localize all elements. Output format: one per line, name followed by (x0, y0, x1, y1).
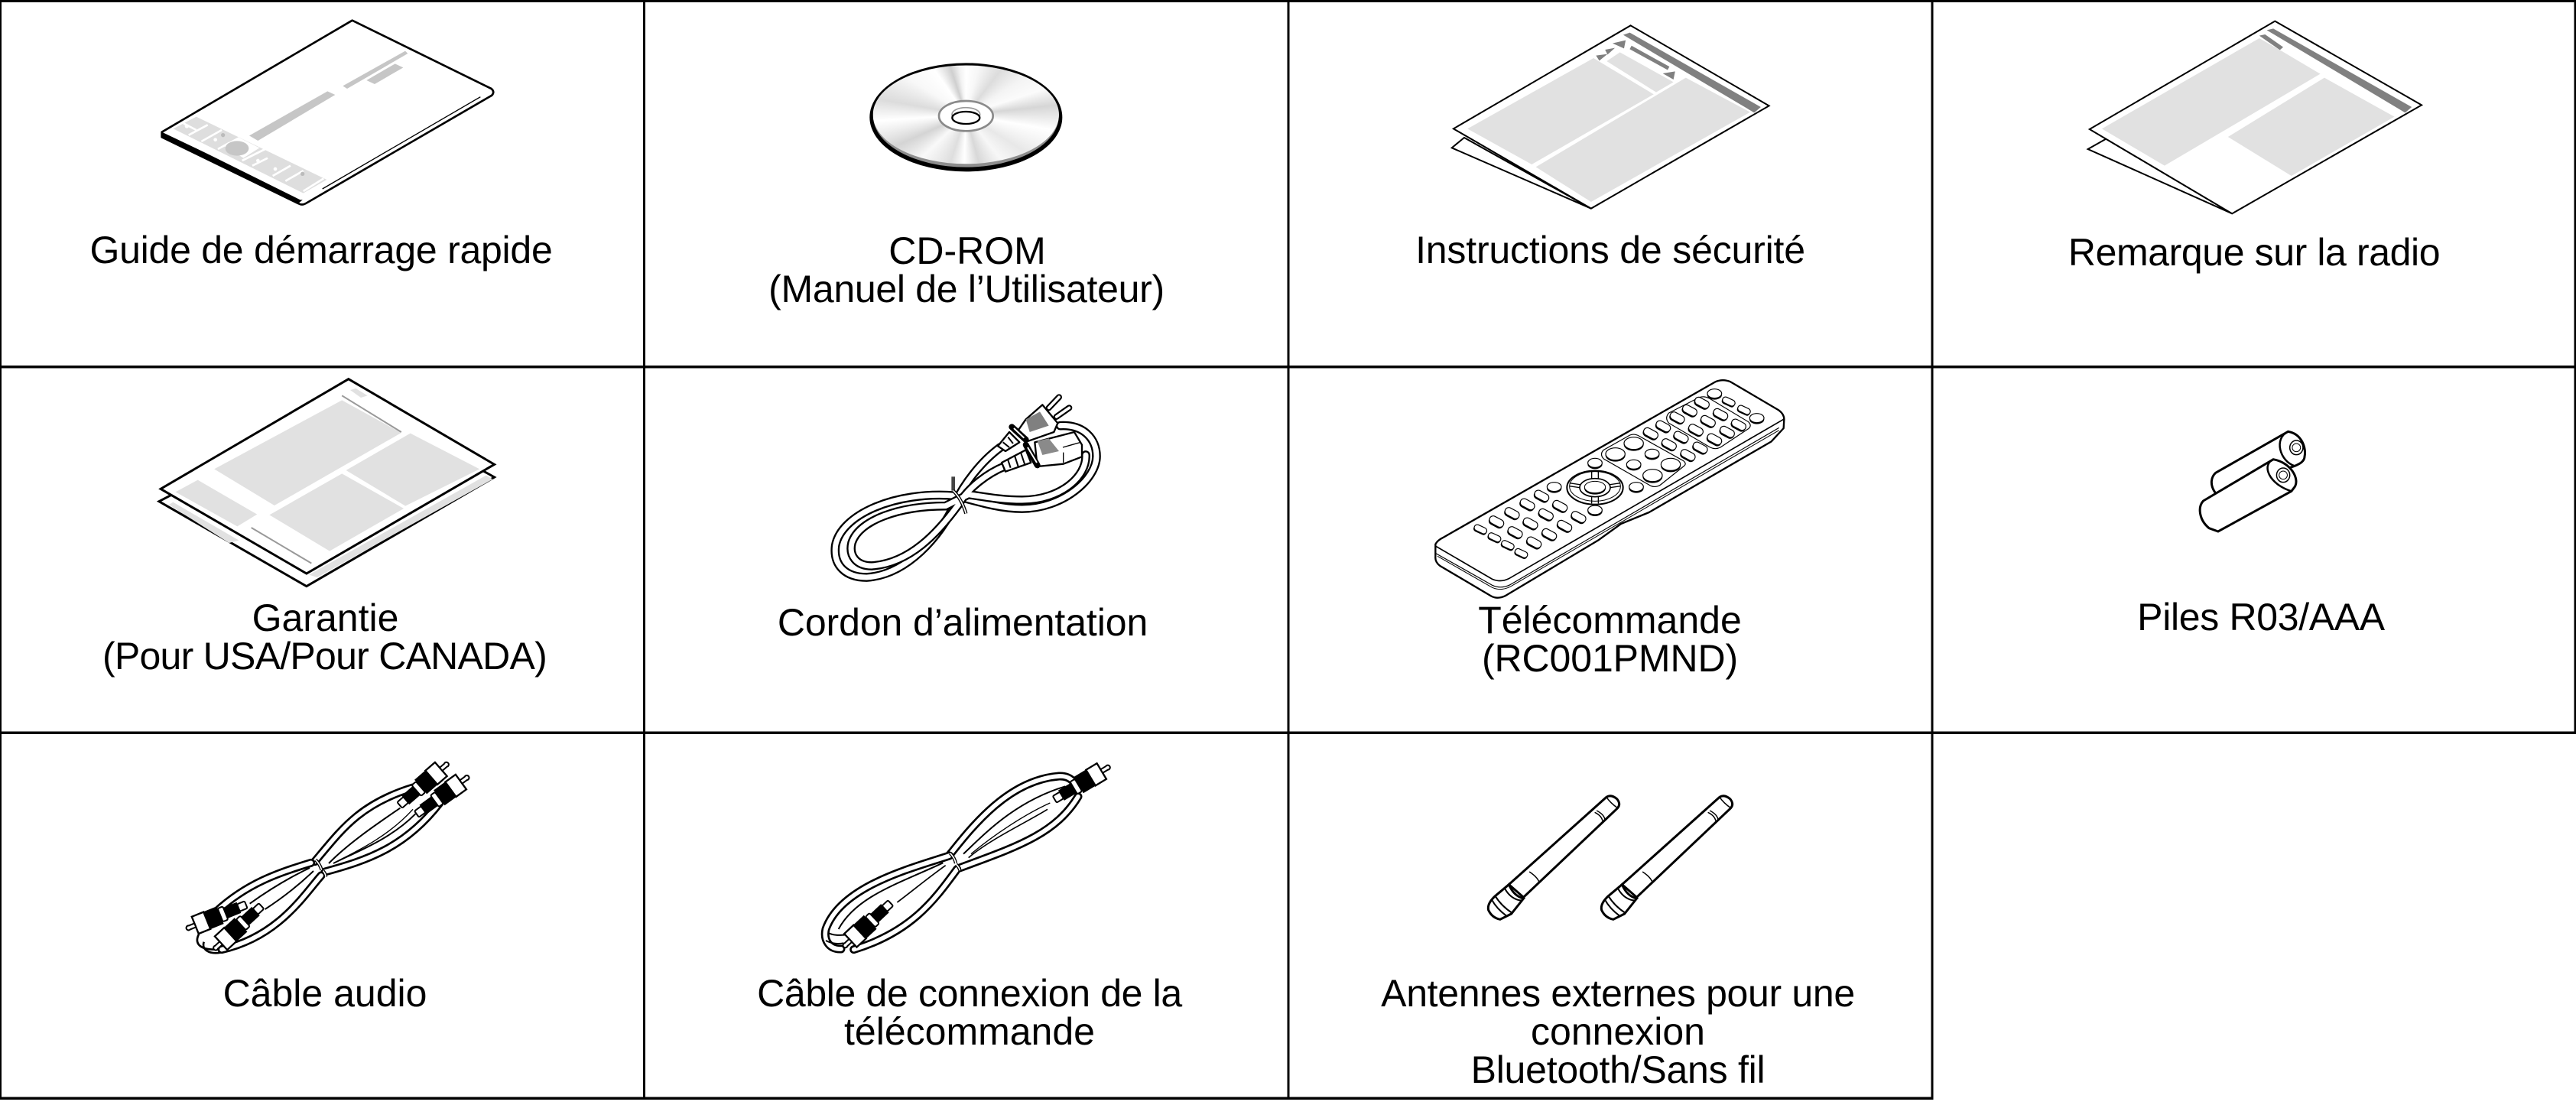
label: Instructions de sécurité (1415, 229, 1805, 271)
icon: warranty leaflet (159, 379, 495, 587)
icon: audio cable (183, 756, 474, 957)
icon: quick start booklet (162, 21, 493, 204)
icon: power cord (835, 397, 1096, 577)
plug prongs (1049, 397, 1069, 417)
button group: transport box (1601, 419, 1709, 486)
label: Piles R03/AAA (2137, 596, 2386, 639)
panel: Guide de démarrage rapide (0, 0, 644, 367)
panel: Cordon d'alimentation (644, 367, 1288, 733)
label: (Pour USA/Pour CANADA) (102, 635, 547, 678)
panel: Antennes externes (1288, 733, 1932, 1099)
label: Télécommande (1478, 599, 1742, 642)
icon: CD-ROM disc (869, 63, 1062, 171)
label: Cordon d’alimentation (778, 601, 1148, 644)
icon: remote connection cable (825, 759, 1115, 954)
panel: Remarque sur la radio (1932, 0, 2576, 367)
icon: batteries (2200, 431, 2305, 531)
button group: lower keypad (1473, 458, 1644, 560)
label: Câble de connexion de la (757, 972, 1182, 1015)
label: connexion (1531, 1010, 1705, 1053)
label: télécommande (844, 1010, 1095, 1053)
label: Remarque sur la radio (2068, 231, 2440, 274)
panel: Télécommande (1288, 367, 1932, 733)
icon: antenna 1 (1488, 796, 1619, 919)
icon: safety instructions leaflet (1452, 25, 1769, 209)
label: Câble audio (223, 972, 427, 1015)
label: CD-ROM (888, 229, 1046, 272)
label: Bluetooth/Sans fil (1471, 1048, 1765, 1091)
label: Guide de démarrage rapide (90, 229, 552, 271)
panel: Instructions de sécurité (1288, 0, 1932, 367)
label: (Manuel de l’Utilisateur) (768, 268, 1165, 310)
icon: antenna 2 (1601, 796, 1733, 919)
d-pad (1567, 471, 1623, 505)
panel: Câble audio (0, 733, 644, 1099)
icon: radio notice leaflet (2088, 21, 2422, 213)
label: (RC001PMND) (1482, 637, 1738, 680)
label: Garantie (252, 596, 398, 639)
panel: CD-ROM (644, 0, 1288, 367)
panel: Piles R03/AAA (1932, 367, 2576, 733)
panel: Garantie (0, 367, 644, 733)
label: Antennes externes pour une (1381, 972, 1855, 1015)
button group: upper keypad (1667, 389, 1764, 449)
icon: remote control (1435, 380, 1784, 598)
panel: Câble de connexion de la télécommande (644, 733, 1288, 1099)
